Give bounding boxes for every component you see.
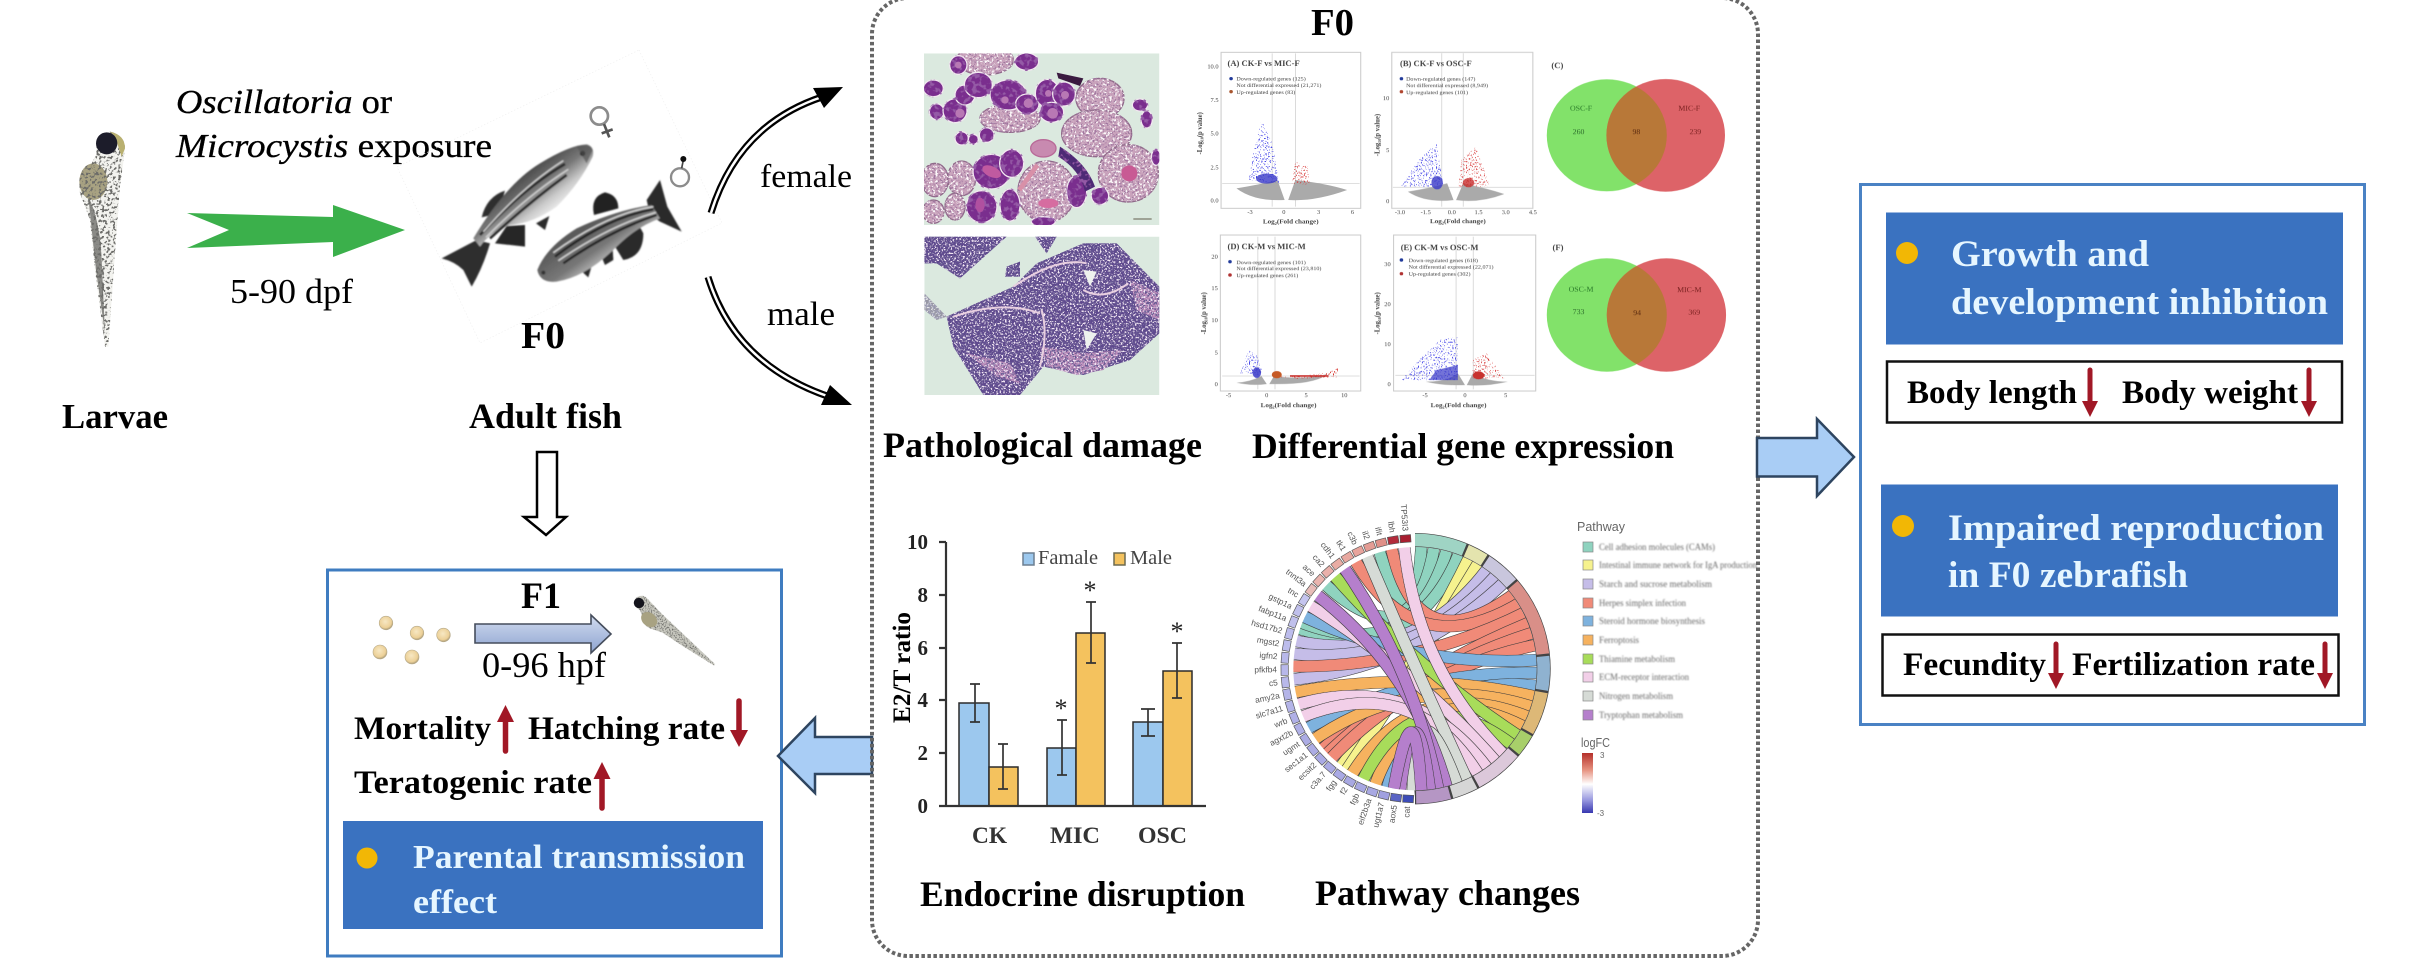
gene labels: c3b [1345, 530, 1360, 547]
gene labels: il2 [1360, 529, 1372, 541]
y tick labels: 10 [907, 530, 928, 554]
legend [1023, 547, 1172, 569]
volcano plot B: Not differential expressed (8,949) [1406, 82, 1488, 89]
volcano plot D: -Log₁₀(p value) [1201, 292, 1208, 334]
y tick labels: 4 [918, 688, 928, 712]
volcano plot A: Not differential expressed (21,271) [1236, 82, 1321, 89]
venn diagram F: 369 [1688, 308, 1700, 317]
mortality up arrow [497, 705, 514, 751]
venn diagram F [1547, 243, 1726, 372]
hollow down arrow [524, 452, 566, 535]
significance stars [1054, 576, 1184, 723]
volcano plot E: -Log₁₀(p value) [1374, 292, 1381, 334]
volcano plot A: (A) CK-F vs MIC-F [1227, 59, 1300, 68]
volcano plot B: Down-regulated genes (147) [1406, 76, 1475, 83]
volcano plot B: Up-regulated genes (101) [1406, 89, 1468, 96]
F1 larva [626, 593, 720, 675]
volcano plot D: Not differential expressed (23,810) [1236, 266, 1321, 272]
error bars [970, 602, 1182, 789]
venn diagram F: 733 [1573, 307, 1585, 316]
F1 heading: F1 [521, 576, 561, 617]
legend: Male [1130, 547, 1172, 569]
volcano plot D [1201, 235, 1361, 409]
volcano plot D: Up-regulated genes (261) [1236, 273, 1298, 279]
volcano plot E: (E) CK-M vs OSC-M [1401, 243, 1479, 252]
volcano plot E: 30 [1384, 261, 1391, 268]
volcano plot B: 0.0 [1448, 209, 1456, 216]
venn diagram C: 260 [1573, 127, 1585, 136]
hatch duration label: 0-96 hpf [482, 645, 606, 685]
gene labels: c5 [1268, 677, 1279, 688]
male label: male [767, 296, 835, 333]
gene labels: fabp11a [1257, 603, 1289, 623]
venn diagram F: 94 [1633, 308, 1641, 317]
y axis title: E2/T ratio [889, 612, 916, 723]
chord diagram: pathways [1251, 504, 1551, 828]
gene labels: ecsit2 [1296, 760, 1319, 782]
volcano plot A: 10.0 [1207, 64, 1219, 71]
female curved arrow [711, 87, 843, 213]
volcano plot A: Up-regulated genes (83) [1236, 89, 1295, 96]
chord legend: pathway: Pathway [1577, 519, 1625, 534]
gene labels: ugt1a7 [1370, 801, 1386, 828]
chord legend: pathway: Thiamine metabolism [1599, 655, 1676, 665]
volcano plot E: -5 [1422, 393, 1428, 399]
gene labels: fgb [1347, 791, 1362, 806]
volcano plot A: 0 [1282, 209, 1286, 216]
female label: female [760, 159, 852, 195]
venn diagram C: 98 [1633, 127, 1641, 136]
volcano plot B: 10 [1383, 96, 1389, 102]
larva illustration [79, 132, 125, 347]
gene labels: fgg [1324, 777, 1339, 793]
venn diagram C: 239 [1689, 127, 1701, 136]
exposure label: Oscillatoria or [176, 84, 393, 121]
volcano plot D: 10 [1211, 317, 1218, 324]
volcano plot B: 4.5 [1529, 209, 1537, 216]
larvae label: Larvae [62, 397, 168, 436]
volcano plot A: -3 [1247, 209, 1253, 216]
duration label: 5-90 dpf [230, 272, 353, 311]
gene labels: aox5 [1386, 804, 1399, 824]
venn diagram C: MIC-F [1678, 104, 1700, 113]
venn diagram C: OSC-F [1570, 104, 1592, 113]
gene labels: TP53I3 [1399, 504, 1411, 532]
growth callout [1886, 212, 2343, 344]
chord legend: pathway: ECM-receptor interaction [1599, 673, 1689, 683]
chord legend: pathway: Herpes simplex infection [1599, 598, 1686, 609]
volcano plot A: 7.5 [1211, 97, 1219, 104]
volcano plot D: 5 [1215, 350, 1218, 357]
mortality label: Mortality [354, 711, 492, 747]
venn diagram C: (C) [1551, 61, 1564, 70]
volcano plot A: Down-regulated genes (125) [1236, 76, 1306, 83]
y tick labels [907, 530, 928, 818]
volcano plot E: Not differential expressed (22,071) [1409, 264, 1494, 271]
gene labels: lbh [1386, 521, 1398, 534]
growth indicators: Body length [1907, 375, 2077, 411]
bar chart: E2/T ratio [889, 530, 1206, 848]
adult fish illustration [397, 50, 722, 343]
logFC colour scale: -3 [1597, 809, 1605, 818]
volcano plot E: 20 [1384, 301, 1391, 308]
male symbol [671, 156, 689, 186]
reproduction callout: Impaired reproduction [1948, 508, 2324, 549]
volcano plot E: 5 [1504, 393, 1507, 399]
volcano plot E: 0 [1387, 382, 1391, 388]
pathway ring [1234, 487, 1596, 850]
gene labels: pfkfb4 [1254, 664, 1277, 675]
volcano plot B: -3.0 [1395, 209, 1405, 216]
significance stars: * [1170, 617, 1184, 646]
chord legend: pathway [1577, 519, 1757, 721]
gene labels: ace [1301, 562, 1318, 579]
gene labels: tnnt3a [1284, 567, 1309, 589]
volcano plot B: Log₂(Fold change) [1430, 219, 1486, 225]
gene labels: cdh1 [1319, 540, 1338, 561]
parental transmission callout: Parental transmission [413, 839, 745, 876]
logFC colour scale: 3 [1600, 751, 1605, 760]
F0 heading: F0 [1311, 2, 1354, 44]
growth indicators: Body weight [2122, 375, 2298, 411]
chord legend: pathway: Tryptophan metabolism [1599, 711, 1684, 721]
growth indicators [1887, 362, 2342, 422]
hatching down arrow [730, 701, 748, 747]
volcano plot D: -5 [1226, 393, 1231, 399]
gene labels: hsd17b2 [1250, 617, 1284, 636]
growth callout: development inhibition [1951, 282, 2328, 323]
male fish [537, 180, 682, 282]
chord legend: pathway: Nitrogen metabolism [1599, 692, 1674, 702]
reproduction indicators: Fertilization rate [2072, 647, 2315, 683]
gene labels: agxt2b [1268, 727, 1295, 748]
gene labels: mgst2 [1256, 635, 1281, 648]
volcano plot D: 20 [1211, 254, 1218, 261]
chord legend: pathway: Starch and sucrose metabolism [1599, 580, 1713, 590]
pathological damage heading: Pathological damage [883, 425, 1202, 465]
volcano plot A: 3 [1317, 209, 1320, 216]
ribbons [1287, 540, 1543, 797]
volcano plot D: Log₂(Fold change) [1261, 403, 1316, 409]
chord legend: pathway: Intestinal immune network for IgA production [1599, 560, 1757, 571]
volcano plot D: 5 [1304, 393, 1308, 399]
axes [939, 542, 1206, 806]
gene labels: ca2 [1311, 552, 1327, 569]
teratogenic rate label: Teratogenic rate [354, 765, 592, 801]
volcano plot E: Up-regulated genes (302) [1409, 271, 1471, 278]
volcano plot D: 0 [1265, 393, 1268, 399]
volcano plot B: -Log₁₀(p value) [1374, 114, 1381, 156]
volcano plot B: 1.5 [1475, 209, 1483, 216]
panel: F0 outcomes [1860, 184, 2364, 724]
growth callout: Growth and [1951, 234, 2149, 275]
histology: testis section [924, 237, 1159, 395]
volcano plot B: 3.0 [1502, 209, 1510, 216]
gene labels: cat [1401, 806, 1412, 818]
gene labels: f2 [1338, 785, 1350, 796]
gene labels: amy2a [1254, 690, 1281, 705]
bars [959, 633, 1192, 806]
reproduction indicators: Fecundity [1903, 647, 2047, 683]
venn diagram C [1547, 61, 1725, 192]
reproduction callout [1881, 484, 2338, 616]
gene labels: slc7a11 [1254, 703, 1284, 721]
volcano plot D: Down-regulated genes (101) [1236, 259, 1306, 266]
volcano plot A [1197, 52, 1361, 225]
venn diagram F: OSC-M [1569, 285, 1594, 294]
arrow to F1 panel [778, 718, 872, 793]
venn diagram F: MIC-M [1677, 286, 1702, 294]
gene labels: c3a.7 [1307, 769, 1328, 791]
volcano plot B: 0 [1386, 198, 1389, 205]
venn diagram F: (F) [1552, 243, 1564, 252]
gene labels: ugmt [1281, 739, 1302, 757]
histology: ovary section [922, 45, 1161, 227]
gene labels: ifit [1373, 526, 1385, 537]
volcano plot A: -Log₁₀(p value) [1197, 112, 1204, 154]
arrow to outcomes panel [1757, 419, 1854, 496]
parental transmission callout [343, 821, 763, 929]
gene labels: igfn2 [1259, 650, 1278, 661]
teratogenic up arrow [594, 762, 610, 808]
chord legend: pathway: Cell adhesion molecules (CAMs) [1599, 542, 1715, 553]
y tick labels: 8 [918, 583, 928, 607]
reproduction callout: in F0 zebrafish [1948, 555, 2188, 596]
gene labels: tk1 [1334, 538, 1349, 553]
volcano plot E: Down-regulated genes (618) [1409, 258, 1478, 264]
volcano plot A: 2.5 [1211, 165, 1219, 171]
logFC colour scale: logFC [1581, 736, 1610, 750]
hatching rate label: Hatching rate [528, 711, 725, 747]
volcano plot D: 0 [1215, 382, 1218, 388]
female symbol [591, 107, 613, 137]
volcano plot B: (B) CK-F vs OSC-F [1400, 59, 1472, 68]
parental transmission callout: effect [413, 884, 498, 921]
volcano plot E: 10 [1384, 341, 1391, 348]
volcano plot E: 0 [1463, 393, 1467, 399]
significance stars: * [1084, 576, 1096, 605]
y tick labels: 6 [918, 636, 928, 660]
x labels [972, 823, 1187, 848]
gene labels: sec1a1 [1282, 750, 1310, 774]
endocrine disruption heading: Endocrine disruption [920, 874, 1245, 914]
male curved arrow [708, 277, 852, 405]
x labels: MIC [1050, 823, 1100, 848]
volcano plot B: -1.5 [1421, 209, 1431, 216]
gene labels: tnc [1286, 585, 1301, 600]
volcano plot D: 15 [1211, 286, 1218, 292]
logFC colour scale [1581, 736, 1610, 818]
female fish [442, 144, 593, 287]
gene labels: gstp1a [1267, 591, 1294, 611]
differential expression charts [1197, 52, 1726, 409]
green exposure arrow [187, 205, 405, 257]
adult fish label: Adult fish [469, 396, 622, 436]
volcano plot A: Log₂(Fold change) [1263, 219, 1319, 225]
gene labels: eif2b3a [1355, 797, 1374, 826]
legend: Famale [1038, 547, 1098, 569]
volcano plot B [1374, 52, 1537, 225]
gene cells [1281, 535, 1414, 803]
chord legend: pathway: Steroid hormone biosynthesis [1599, 617, 1705, 627]
gene labels: wrb [1272, 715, 1289, 730]
panel: F0 findings dotted frame [872, 0, 1758, 956]
volcano plot B: 5 [1386, 147, 1389, 154]
development arrow [475, 615, 611, 653]
pathway changes heading: Pathway changes [1315, 873, 1580, 913]
volcano plot D: 10 [1341, 393, 1347, 399]
exposure label [175, 84, 492, 165]
y tick labels: 2 [918, 741, 928, 765]
volcano plot E [1374, 235, 1536, 409]
x labels: CK [972, 823, 1007, 848]
F0 fish label: F0 [521, 315, 565, 357]
significance stars: * [1054, 694, 1068, 723]
differential gene expression heading: Differential gene expression [1252, 426, 1674, 466]
volcano plot E: Log₂(Fold change) [1431, 403, 1486, 409]
chord legend: pathway: Ferroptosis [1599, 636, 1639, 646]
volcano plot A: 5.0 [1211, 131, 1219, 137]
reproduction indicators [1882, 634, 2338, 696]
volcano plot D: (D) CK-M vs MIC-M [1227, 243, 1306, 251]
panel: F1 generation [328, 570, 782, 956]
x labels: OSC [1138, 823, 1187, 848]
gene labels [1250, 504, 1412, 828]
eggs [373, 616, 450, 664]
y tick labels: 0 [918, 794, 928, 818]
exposure label: Microcystis exposure [175, 128, 492, 165]
volcano plot A: 0.0 [1211, 198, 1219, 205]
volcano plot A: 6 [1351, 209, 1354, 216]
